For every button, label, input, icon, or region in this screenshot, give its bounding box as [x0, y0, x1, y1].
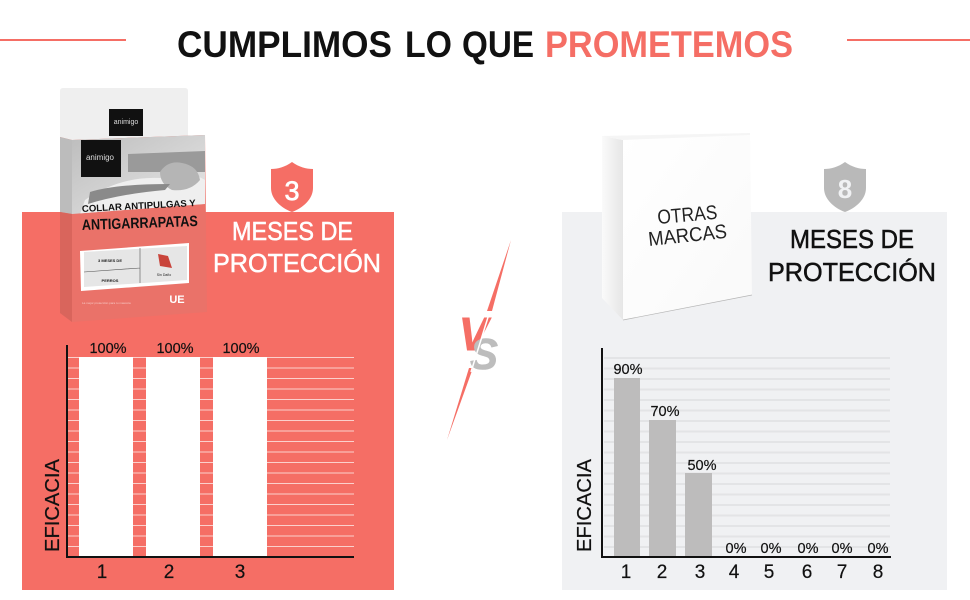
product box: animigo collar: UE — [169, 294, 185, 306]
product box: animigo collar: La mejor protección para tu mascota — [82, 301, 131, 305]
panel: otras marcas (grey) — [562, 133, 947, 590]
heading: meses de proteccion (red panel): MESES DE — [232, 218, 353, 246]
axis numbers — [97, 562, 245, 583]
product box: otras marcas: OTRAS — [657, 202, 718, 229]
value labels: 0% — [798, 541, 819, 557]
title: LO — [405, 24, 452, 65]
value labels — [89, 341, 260, 357]
icon: shield with 8 months: 8 — [838, 174, 852, 204]
product box: otras marcas — [602, 133, 752, 320]
value labels: 0% — [868, 541, 889, 557]
value labels: 0% — [726, 541, 747, 557]
chart: eficacia animigo — [42, 341, 354, 583]
vs badge: V — [459, 308, 491, 360]
axis numbers: 7 — [837, 562, 847, 583]
product box: animigo collar — [60, 88, 207, 322]
value labels: 100% — [156, 341, 194, 357]
value labels — [613, 362, 889, 557]
axis label: EFICACIA — [42, 458, 64, 552]
icon: shield with 3 months — [271, 162, 313, 212]
axis numbers: 2 — [657, 562, 667, 583]
axis numbers: 8 — [873, 562, 883, 583]
axis numbers: 4 — [729, 562, 740, 583]
value labels: 90% — [613, 362, 643, 378]
title: PROMETEMOS — [545, 24, 793, 65]
title: QUE — [462, 24, 534, 65]
bars — [79, 357, 267, 557]
title: CUMPLIMOS — [177, 24, 392, 65]
vs badge: S — [470, 330, 498, 379]
product box: animigo collar: animigo — [114, 119, 138, 126]
product box: animigo collar: COLLAR ANTIPULGAS Y — [82, 198, 197, 215]
value labels: 0% — [761, 541, 782, 557]
axis numbers: 2 — [164, 562, 174, 583]
icon: shield with 3 months: 3 — [284, 176, 300, 206]
axis numbers: 3 — [695, 562, 705, 583]
value labels: 70% — [650, 404, 680, 420]
icon: shield with 8 months — [824, 162, 866, 212]
chart: eficacia otras marcas — [574, 348, 891, 583]
heading: meses de proteccion (red panel) — [213, 218, 381, 278]
panel: animigo (red) — [22, 88, 394, 590]
value labels: 100% — [89, 341, 127, 357]
vs badge — [447, 240, 511, 440]
product box: otras marcas: MARCAS — [647, 221, 728, 251]
value labels: 100% — [222, 341, 260, 357]
axis numbers: 5 — [764, 562, 774, 583]
bars — [614, 378, 712, 557]
heading: meses de proteccion (red panel): PROTECCIÓN — [213, 249, 381, 278]
value labels: 0% — [832, 541, 853, 557]
heading: meses de proteccion (grey panel): MESES DE — [790, 226, 914, 254]
product box: animigo collar: ANTIGARRAPATAS — [82, 213, 198, 234]
value labels: 50% — [687, 458, 717, 474]
axis numbers — [621, 562, 883, 583]
heading: meses de proteccion (grey panel): PROTECCIÓN — [768, 258, 936, 287]
product box: animigo collar: animigo — [86, 153, 115, 162]
product box: animigo collar: 3 MESES DE — [98, 258, 122, 263]
product box: animigo collar: Sin Daño — [157, 273, 171, 277]
product box: animigo collar: PERROS — [102, 278, 119, 283]
title — [0, 24, 970, 65]
axis numbers: 1 — [621, 562, 631, 583]
axis label: EFICACIA — [574, 458, 596, 552]
axis numbers: 3 — [235, 562, 245, 583]
axis numbers: 1 — [97, 562, 107, 583]
axis numbers: 6 — [802, 562, 812, 583]
heading: meses de proteccion (grey panel) — [768, 226, 936, 287]
